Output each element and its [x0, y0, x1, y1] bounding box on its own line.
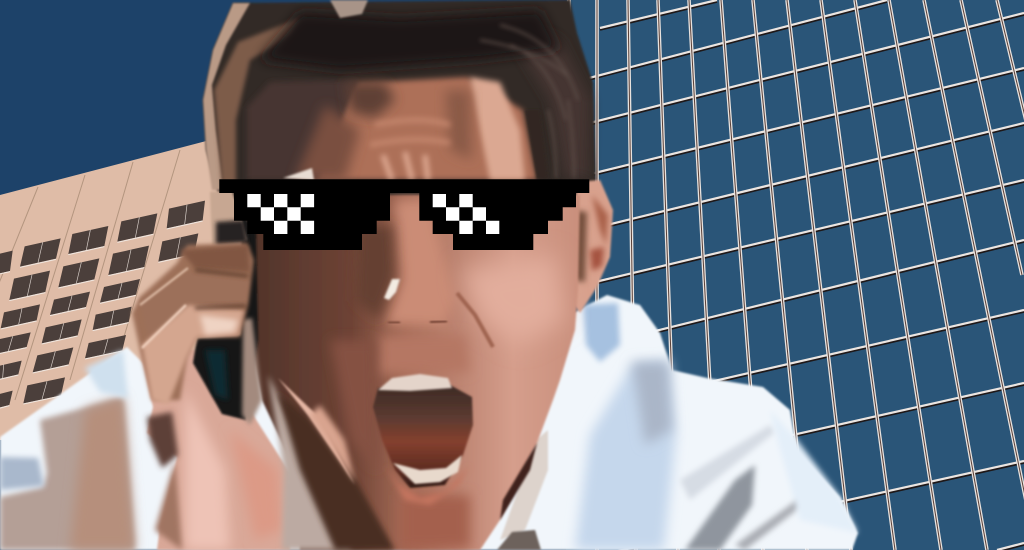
right collar and tie knot: [497, 430, 548, 550]
hair side strands: [203, 0, 590, 190]
left shirt shadow: [0, 397, 135, 550]
left tan building: [0, 140, 260, 440]
left collar grey: [268, 375, 352, 550]
lower teeth: [393, 455, 462, 484]
cheek highlight: [460, 255, 565, 345]
nasolabial fold: [457, 293, 493, 347]
chin highlight: [400, 495, 470, 550]
upper lip and left cheek shadow: [378, 335, 470, 375]
lower lip: [385, 465, 470, 505]
sideburn: [210, 190, 247, 245]
right glass skyscraper: [566, 0, 1024, 550]
nostrils: [388, 321, 447, 323]
nostril highlight: [384, 279, 400, 300]
shirt: [0, 295, 858, 550]
forehead: [247, 77, 548, 180]
nose: [385, 200, 455, 325]
fingers: [180, 245, 250, 272]
building windows: [0, 201, 205, 412]
shoulder fold shadows: [575, 360, 676, 550]
left lens pixels: [247, 194, 314, 234]
face: [245, 195, 580, 550]
mouth: [373, 374, 473, 505]
phone: [193, 215, 262, 425]
hair silhouette: [203, 0, 596, 200]
pixel sunglasses: [219, 179, 589, 250]
right lens pixels: [433, 194, 499, 234]
collar shadow blue: [583, 303, 620, 362]
arm: [140, 350, 290, 550]
hand: [132, 243, 254, 405]
jaw shadow: [277, 392, 395, 550]
upper teeth: [378, 374, 452, 391]
ear: [570, 180, 613, 313]
right jaw shadow: [500, 443, 537, 520]
